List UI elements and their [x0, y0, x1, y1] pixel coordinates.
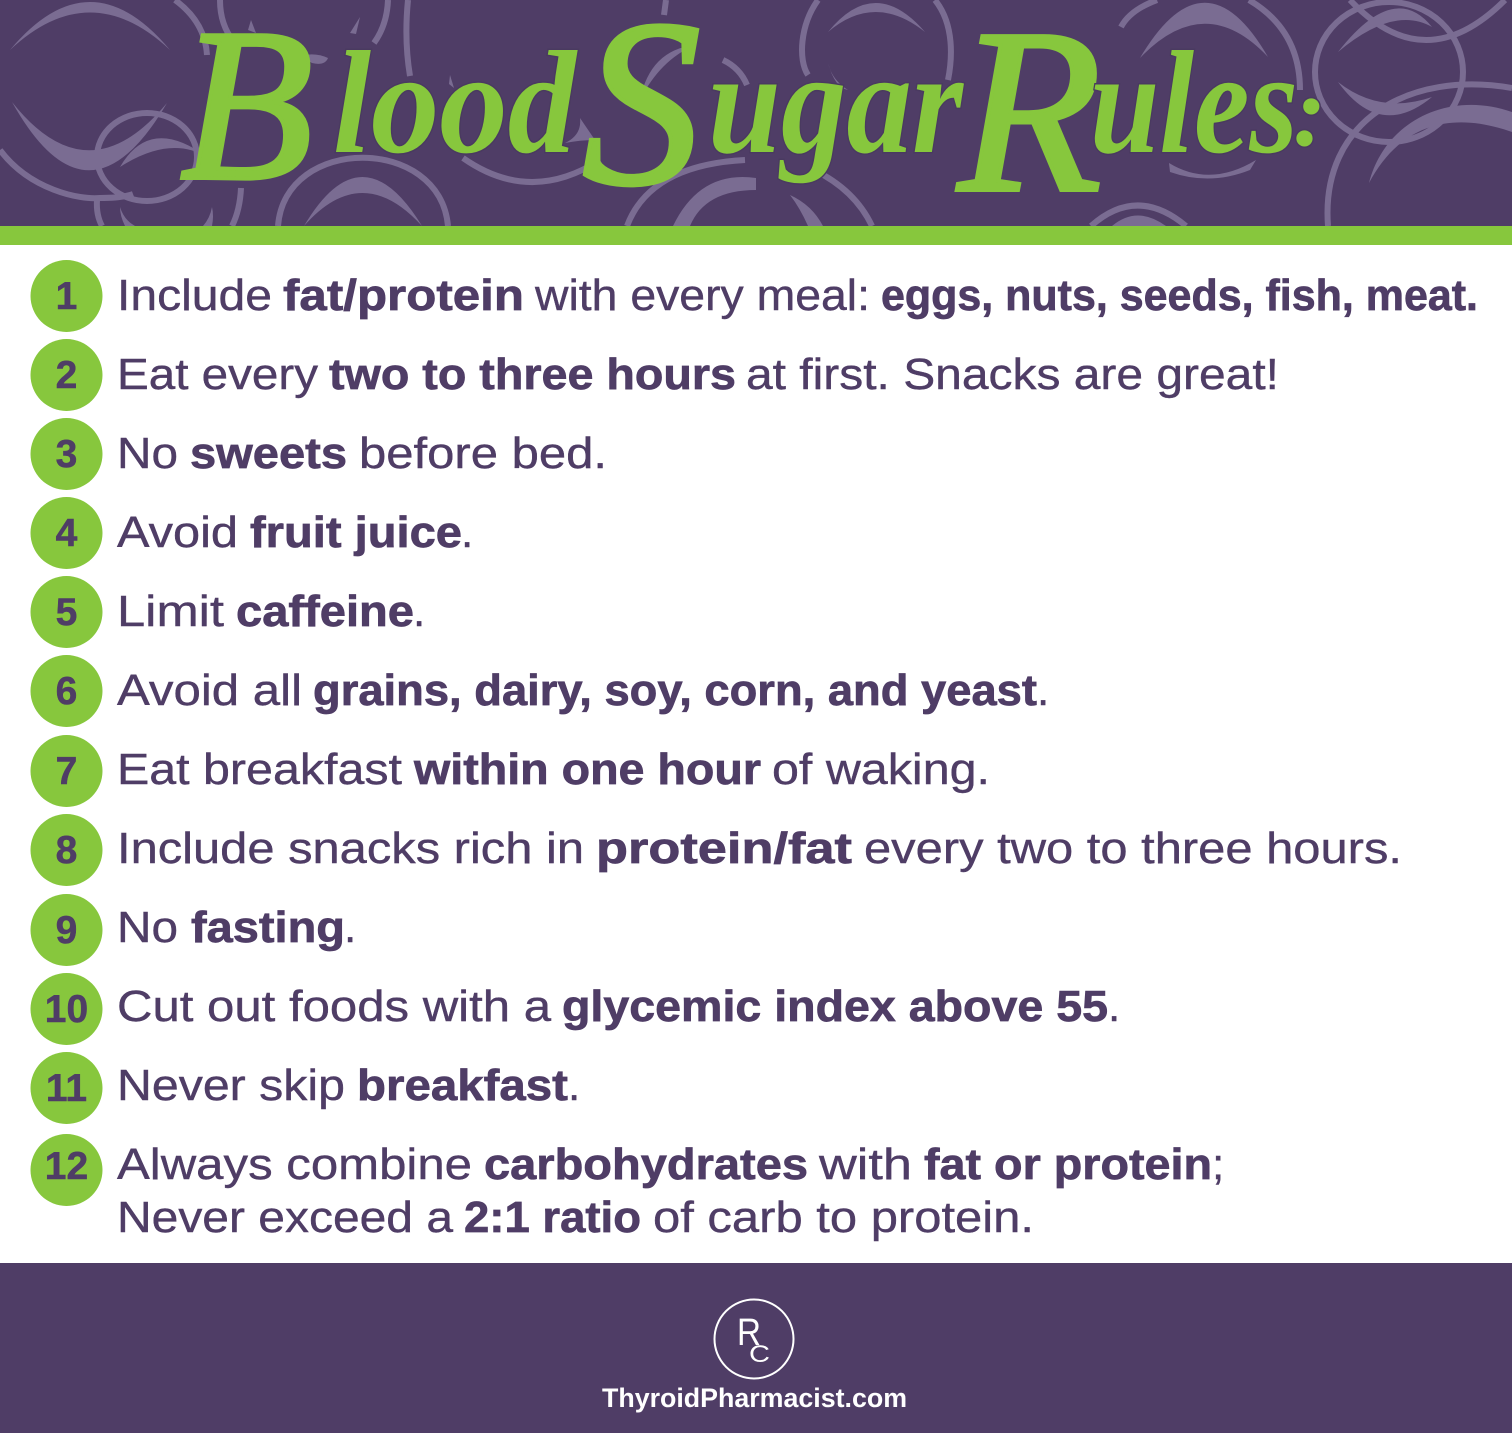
rule 10: Cut out foods with a [117, 982, 552, 1031]
rule 2 [30, 339, 1279, 411]
title: Blood Sugar Rules: lood [333, 21, 578, 184]
rule 12: ; [1212, 1140, 1224, 1189]
logo: RC monogram: R [737, 1312, 761, 1354]
rule 2: Eat every [117, 350, 318, 399]
number badge 7: 7 [56, 750, 77, 793]
number badge 7 [30, 735, 102, 807]
rule 10: . [1108, 982, 1120, 1031]
rule 11: Never skip [117, 1061, 345, 1110]
number badge 11 [30, 1052, 102, 1124]
rule 5: caffeine [236, 587, 414, 636]
rule 7: Eat breakfast [117, 745, 402, 794]
number badge 3: 3 [56, 433, 77, 476]
rule 11: . [568, 1061, 580, 1110]
rule 1: Include [117, 271, 272, 320]
rule 7: of waking. [772, 745, 990, 794]
title: Blood Sugar Rules: : [1293, 56, 1326, 167]
rule 6: . [1037, 666, 1049, 715]
rule 9 [30, 894, 356, 966]
rule 8 [30, 814, 1402, 886]
number badge 12: 12 [45, 1145, 88, 1188]
rule 9: . [344, 903, 356, 952]
rule 10: glycemic index above 55 [562, 982, 1108, 1031]
number badge 3 [30, 418, 102, 490]
rule 12: 2:1 ratio [464, 1193, 641, 1242]
rule 3: No [117, 429, 178, 478]
rule 5 [30, 576, 425, 648]
rule 6 [30, 655, 1049, 727]
title: Blood Sugar Rules [180, 0, 1326, 241]
rule 3: before bed. [359, 429, 607, 478]
rule 8: Include snacks rich in [117, 824, 584, 873]
rule 5: Limit [117, 587, 224, 636]
rule 12: with [818, 1140, 912, 1189]
number badge 8 [30, 814, 102, 886]
number badge 2: 2 [56, 354, 77, 397]
rule 6: grains, dairy, soy, corn, and yeast [313, 666, 1037, 715]
number badge 12 [30, 1134, 102, 1206]
rule 12: fat or protein [924, 1140, 1212, 1189]
rule 4: . [461, 508, 473, 557]
title: Blood Sugar Rules: ugar [708, 21, 965, 184]
rule 2: at first. Snacks are great! [746, 350, 1279, 399]
rule 11: breakfast [357, 1061, 568, 1110]
number badge 8: 8 [56, 829, 77, 872]
rule 7: within one hour [413, 745, 761, 794]
rule 12: carbohydrates [484, 1140, 808, 1189]
number badge 10 [30, 973, 102, 1045]
rule 12: of carb to protein. [653, 1193, 1034, 1242]
rule 1: with every meal: [534, 271, 870, 320]
rule 6: Avoid all [117, 666, 302, 715]
number badge 9 [30, 894, 102, 966]
rule 4: fruit juice [250, 508, 462, 557]
rule 10 [30, 973, 1120, 1045]
rule 2: two to three hours [329, 350, 736, 399]
number badge 6: 6 [56, 670, 77, 713]
number badge 10: 10 [45, 988, 88, 1031]
rule 7 [30, 735, 990, 807]
rule 11 [30, 1052, 580, 1124]
rule 12: Never exceed a [117, 1193, 454, 1242]
rule 1 [30, 260, 1478, 332]
rule 4: Avoid [117, 508, 238, 557]
number badge 1 [30, 260, 102, 332]
rule 8: every two to three hours. [864, 824, 1402, 873]
website label: ThyroidPharmacist.com [602, 1383, 907, 1413]
green divider band [0, 226, 1512, 245]
number badge 5: 5 [56, 591, 77, 634]
title: Blood Sugar Rules: ules [1090, 21, 1298, 184]
number badge 11: 11 [46, 1067, 87, 1110]
rule 8: protein/fat [596, 824, 852, 873]
logo: RC monogram: C [749, 1341, 770, 1368]
number badge 1: 1 [56, 275, 77, 318]
number badge 9: 9 [56, 909, 77, 952]
rule 9: No [117, 903, 178, 952]
rule 12: Always combine [117, 1140, 472, 1189]
rule 9: fasting [191, 903, 345, 952]
rule 5: . [413, 587, 425, 636]
number badge 4: 4 [56, 512, 78, 555]
rule 12 [30, 1134, 1224, 1242]
number badge 4 [30, 497, 102, 569]
number badge 6 [30, 655, 102, 727]
panel: header background [0, 0, 1512, 226]
panel: footer [0, 1263, 1512, 1433]
number badge 2 [30, 339, 102, 411]
rule 3: sweets [190, 429, 347, 478]
rule 3 [30, 418, 607, 490]
number badge 5 [30, 576, 102, 648]
rule 1: fat/protein [283, 271, 524, 320]
rule 1: eggs, nuts, seeds, fish, meat. [881, 271, 1478, 320]
logo: RC monogram [714, 1300, 794, 1378]
rule 4 [30, 497, 473, 569]
